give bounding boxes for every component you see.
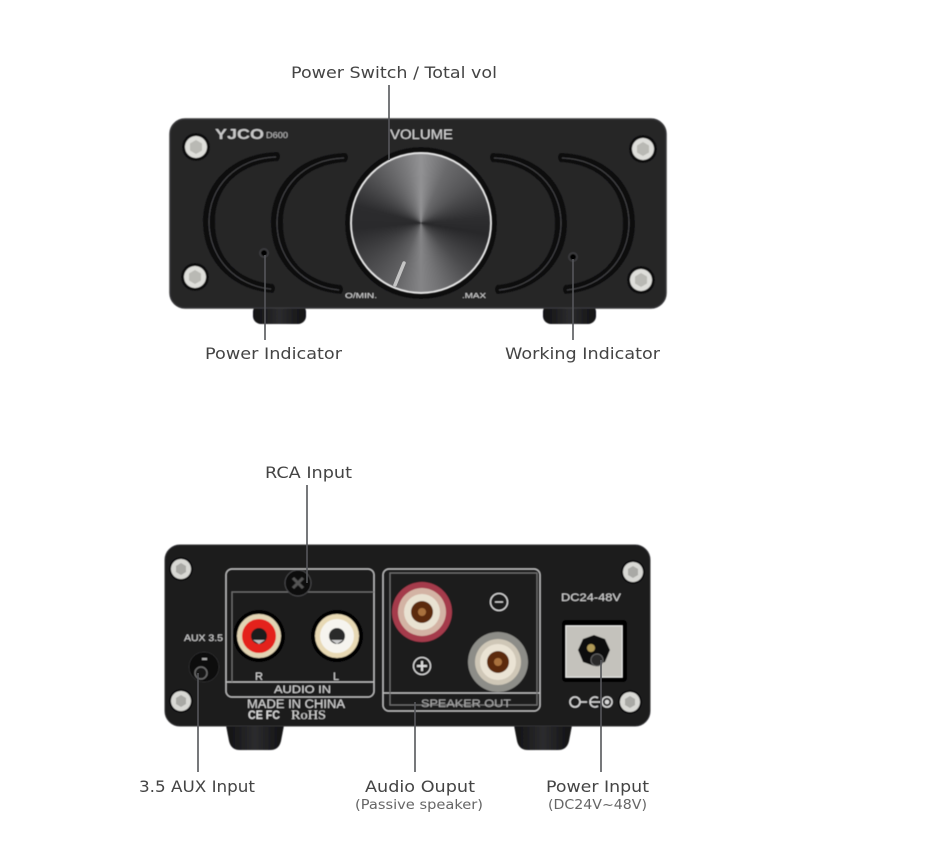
rear panel printing: AUDIO IN	[274, 684, 331, 696]
rear labels and leader lines: Power Input	[546, 777, 649, 796]
rear panel printing: RoHS	[291, 708, 326, 722]
front amplifier body	[170, 119, 666, 308]
RCA L jack	[311, 610, 363, 662]
red binding post	[392, 582, 452, 642]
front panel printing: D600	[266, 131, 289, 140]
rear panel printing: L	[333, 671, 339, 683]
front labels and leader lines: Working Indicator	[505, 344, 660, 363]
rear panel printing: SPEAKER OUT	[421, 698, 511, 710]
center screw	[285, 570, 311, 596]
DC power jack	[562, 620, 627, 682]
front feet	[253, 304, 596, 324]
rear panel printing	[184, 592, 622, 722]
front screws	[181, 133, 657, 294]
rear body	[165, 545, 650, 726]
front panel printing: O/MIN.	[345, 291, 377, 300]
front labels and leader lines	[205, 63, 660, 363]
front labels and leader lines: Power Switch / Total vol	[291, 63, 497, 82]
front panel printing: YJCO	[215, 126, 264, 143]
rear labels and leader lines: Audio Ouput	[365, 777, 475, 796]
front labels and leader lines: Power Indicator	[205, 344, 342, 363]
rear panel printing: CE FC	[248, 710, 280, 722]
rear labels and leader lines: (Passive speaker)	[355, 798, 483, 813]
knob recess	[345, 147, 497, 299]
RCA R jack	[233, 610, 285, 662]
knob	[350, 152, 492, 294]
rear panel printing: AUX 3.5	[184, 633, 223, 644]
audio in box	[226, 569, 374, 697]
rear panel printing: MADE IN CHINA	[247, 699, 345, 711]
rear labels and leader lines: 3.5 AUX Input	[139, 777, 255, 796]
rear amplifier	[165, 545, 650, 750]
rear panel printing: R	[255, 671, 263, 683]
aux jack	[189, 652, 219, 682]
rear labels and leader lines: (DC24V~48V)	[548, 798, 647, 813]
rear screws	[169, 557, 645, 714]
speaker out box	[383, 569, 540, 711]
rear labels and leader lines: RCA Input	[265, 463, 352, 482]
rear feet	[225, 720, 573, 750]
silver binding post	[468, 632, 528, 692]
rear labels and leader lines	[139, 463, 649, 813]
indicators	[260, 249, 577, 261]
rear panel printing: DC24-48V	[561, 592, 622, 604]
knob pointer	[395, 263, 404, 285]
front panel printing	[215, 126, 486, 300]
front panel printing: .MAX	[462, 291, 486, 300]
front panel printing: VOLUME	[390, 127, 453, 142]
DC polarity symbol	[570, 697, 612, 707]
polarity marks	[414, 594, 508, 674]
front vent slots	[203, 152, 635, 294]
